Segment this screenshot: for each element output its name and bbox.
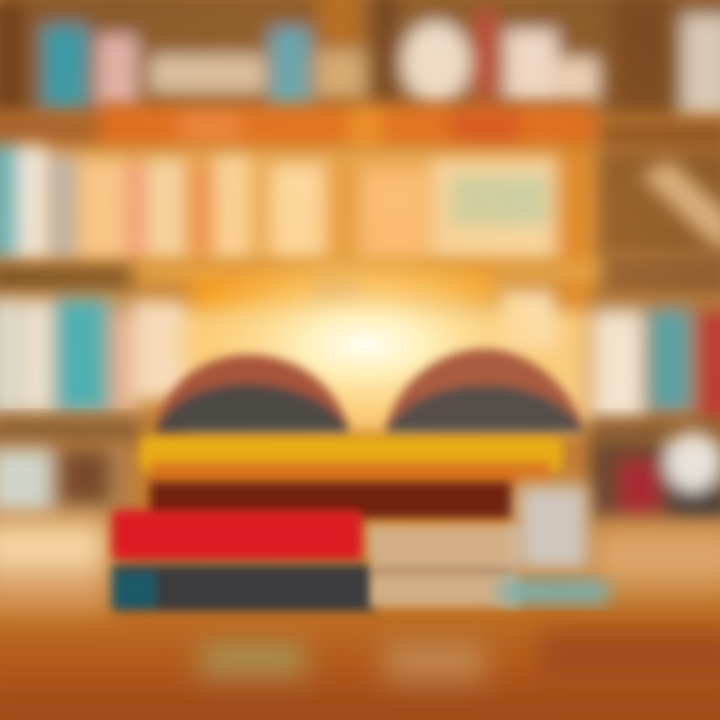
table highlights: [0, 520, 720, 720]
lower shelf board: [0, 252, 720, 321]
object: grey white figure: [518, 485, 588, 570]
book: dark red: [150, 482, 512, 518]
right page dome: [385, 349, 585, 432]
bottom shelf board: [0, 417, 720, 445]
central light glow: [165, 250, 565, 440]
open book: [155, 349, 585, 432]
bottom shelf books: [0, 432, 720, 520]
table surface: [0, 520, 720, 720]
book: yellow top: [140, 436, 562, 484]
left page dome: [155, 355, 350, 432]
stack of books: [112, 436, 608, 611]
book: dark navy: [112, 565, 374, 611]
book: bright red: [112, 510, 362, 560]
object: teal base: [500, 580, 608, 604]
diagonal leaning book: [640, 160, 720, 262]
upper shelf board: [0, 105, 720, 150]
middle shelf row: [0, 145, 720, 330]
book: cream stack: [368, 525, 523, 607]
lower shelf row: [0, 290, 720, 430]
top shelf row: [0, 0, 720, 115]
